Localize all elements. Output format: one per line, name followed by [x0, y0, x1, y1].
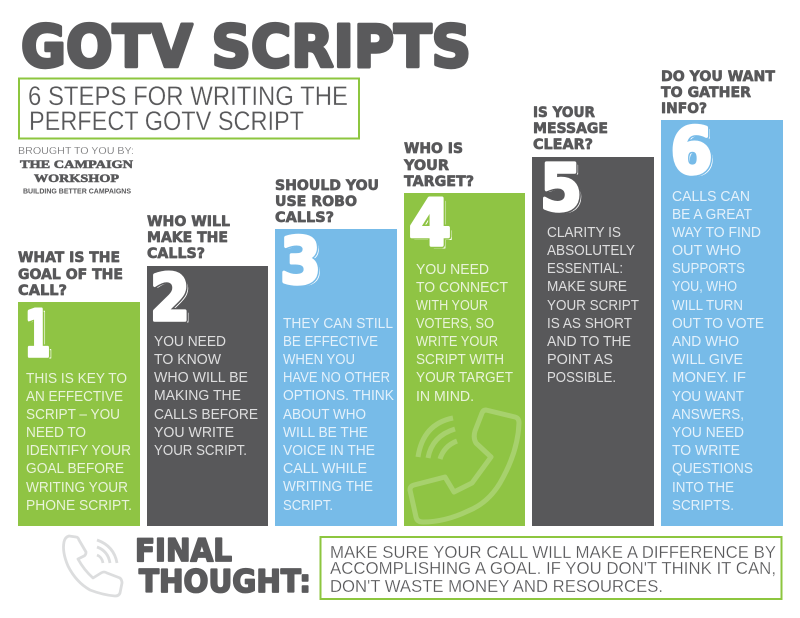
- step 6 text: [672, 189, 764, 514]
- step 6 text: SUPPORTS: [672, 261, 745, 277]
- step 1 text: SCRIPT – YOU: [26, 407, 120, 423]
- step 6 numeral: 6: [670, 115, 712, 189]
- step 4 numeral: 4: [409, 187, 451, 261]
- step 3 numeral: 3: [280, 225, 321, 299]
- step 4 text: YOUR TARGET: [416, 370, 513, 386]
- credit: The Campaign Workshop: BUILDING BETTER CAMPAIGNS: [23, 188, 131, 196]
- step 3 heading: SHOULD YOU: [275, 178, 379, 194]
- step 1 heading: GOAL OF THE: [18, 267, 123, 283]
- step 3 panel: [275, 229, 397, 526]
- step 3 text: HAVE NO OTHER: [283, 370, 390, 386]
- step 3 heading: [275, 178, 379, 226]
- step 2 numeral: 2: [150, 262, 190, 336]
- step 2 text: [154, 334, 258, 459]
- step 2 panel: [147, 266, 268, 526]
- step 6 text: YOU WANT: [672, 389, 744, 405]
- step 4 heading: TARGET?: [404, 174, 474, 190]
- subtitle box: 6 STEPS FOR WRITING THE: [28, 81, 348, 111]
- step 5: [532, 105, 654, 526]
- step 1 numeral: 1: [24, 298, 50, 372]
- step 6 text: WILL TURN: [672, 298, 743, 314]
- final thought heading: FINAL: [135, 533, 232, 569]
- step 2 text: TO KNOW: [154, 352, 221, 368]
- step 5 numeral: 5: [540, 152, 582, 226]
- step 4 heading: WHO IS: [404, 141, 463, 157]
- step 6 text: INTO THE: [672, 480, 734, 496]
- step 5 heading: MESSAGE: [533, 121, 608, 137]
- step 1 numeral: 1: [28, 300, 54, 374]
- step 4: [403, 141, 525, 526]
- step 3 heading: CALLS?: [275, 210, 334, 226]
- step 1: [18, 250, 140, 526]
- step 6 text: OUT WHO: [672, 243, 741, 259]
- title: GOTV SCRIPTS: [21, 12, 471, 80]
- step 5 panel: [532, 157, 654, 526]
- step 3 text: THEY CAN STILL: [283, 316, 393, 332]
- step 2 heading: MAKE THE: [147, 230, 228, 246]
- credit: The Campaign Workshop: [18, 145, 134, 196]
- step 6 heading: INFO?: [661, 101, 707, 117]
- step 6 text: SCRIPTS.: [672, 498, 734, 514]
- step 1 heading: WHAT IS THE: [18, 250, 120, 266]
- step 5 text: MAKE SURE: [547, 279, 627, 295]
- step 4 text: WITH YOUR: [416, 298, 488, 314]
- step 5 text: POSSIBLE.: [547, 370, 616, 386]
- step 2 text: WHO WILL BE: [154, 370, 248, 386]
- step 4 heading: YOUR: [403, 158, 449, 174]
- icon: telephone watermark: [410, 410, 519, 522]
- step 4 text: VOTERS, SO: [416, 316, 494, 332]
- step 5 heading: [533, 105, 608, 153]
- step 2 numeral: 2: [153, 264, 193, 338]
- step 3: [275, 178, 397, 526]
- step 5 text: ABSOLUTELY: [547, 243, 635, 259]
- step 1 numeral: 1: [24, 298, 50, 372]
- step 1 text: NEED TO: [26, 425, 86, 441]
- step 2 heading: [147, 214, 230, 262]
- final thought box: MAKE SURE YOUR CALL WILL MAKE A DIFFERENCE BY: [330, 542, 776, 562]
- step 1 text: THIS IS KEY TO: [26, 371, 127, 387]
- step 2 heading: CALLS?: [147, 246, 205, 262]
- step 6 numeral: 6: [674, 117, 716, 191]
- step 5 numeral: 5: [543, 154, 585, 228]
- step 4 text: YOU NEED: [416, 262, 489, 278]
- step 2 text: MAKING THE: [154, 388, 241, 404]
- step 4 heading: [403, 141, 474, 190]
- step 4 numeral: 4: [409, 187, 451, 261]
- step 1 panel: [18, 302, 140, 526]
- step 4 text: [416, 262, 513, 405]
- credit: The Campaign Workshop: THE CAMPAIGN: [20, 157, 133, 171]
- step 6: [661, 69, 783, 526]
- step 5 heading: CLEAR?: [533, 137, 593, 153]
- step 4 text: SCRIPT WITH: [416, 352, 504, 368]
- step 3 text: ABOUT WHO: [283, 407, 366, 423]
- step 6 text: MONEY. IF: [672, 370, 746, 386]
- step 5 text: POINT AS: [547, 352, 613, 368]
- step 6 text: BE A GREAT: [672, 207, 752, 223]
- credit: The Campaign Workshop: WORKSHOP: [34, 171, 119, 185]
- step 4 panel: [404, 193, 525, 526]
- step 3 text: CALL WHILE: [283, 461, 367, 477]
- final thought box: ACCOMPLISHING A GOAL. IF YOU DON'T THINK IT CAN,: [330, 558, 776, 578]
- step 3 text: WRITING THE: [283, 479, 373, 495]
- step 5 text: CLARITY IS: [547, 225, 621, 241]
- step 3 text: VOICE IN THE: [283, 443, 375, 459]
- step 4 text: WRITE YOUR: [416, 334, 498, 350]
- final thought box: [320, 537, 782, 599]
- step 2: [147, 214, 268, 526]
- step 3 text: WHEN YOU: [283, 352, 355, 368]
- step 5 text: AND TO THE: [547, 334, 631, 350]
- step 1 text: [26, 371, 132, 514]
- step 1 text: GOAL BEFORE: [26, 461, 124, 477]
- step 6 text: QUESTIONS: [672, 461, 753, 477]
- step 3 numeral: 3: [280, 225, 321, 299]
- step 6 panel: [661, 120, 783, 526]
- step 6 text: YOU NEED: [672, 425, 744, 441]
- step 5 text: IS AS SHORT: [547, 316, 632, 332]
- step 6 heading: [661, 69, 775, 117]
- step 2 numeral: 2: [150, 262, 190, 336]
- step 3 text: BE EFFECTIVE: [283, 334, 378, 350]
- icon: telephone: [64, 536, 122, 596]
- step 6 heading: DO YOU WANT: [661, 69, 775, 85]
- subtitle box: [19, 78, 359, 138]
- step 3 text: WILL BE THE: [283, 425, 368, 441]
- final thought heading: [135, 533, 311, 600]
- step 4 text: IN MIND.: [416, 389, 474, 405]
- step 3 heading: USE ROBO: [275, 194, 357, 210]
- step 2 text: CALLS BEFORE: [154, 407, 258, 423]
- step 6 text: AND WHO: [672, 334, 739, 350]
- step 6 numeral: 6: [670, 115, 712, 189]
- subtitle box: PERFECT GOTV SCRIPT: [29, 106, 304, 136]
- step 3 text: OPTIONS. THINK: [283, 388, 394, 404]
- step 5 numeral: 5: [540, 152, 582, 226]
- step 2 heading: WHO WILL: [147, 214, 230, 230]
- step 1 text: AN EFFECTIVE: [26, 389, 123, 405]
- step 1 text: IDENTIFY YOUR: [26, 443, 131, 459]
- step 5 text: ESSENTIAL:: [547, 261, 623, 277]
- step 1 heading: [18, 250, 123, 299]
- step 6 text: WAY TO FIND: [672, 225, 761, 241]
- step 6 text: TO WRITE: [672, 443, 740, 459]
- step 4 numeral: 4: [412, 190, 454, 264]
- step 5 text: [547, 225, 639, 386]
- step 3 text: SCRIPT.: [283, 498, 333, 514]
- credit: The Campaign Workshop: BROUGHT TO YOU BY:: [18, 145, 134, 157]
- step 2 text: YOU WRITE: [154, 425, 234, 441]
- step 6 text: OUT TO VOTE: [672, 316, 764, 332]
- step 2 text: YOU NEED: [154, 334, 226, 350]
- step 6 text: CALLS CAN: [672, 189, 750, 205]
- final thought heading: THOUGHT:: [139, 564, 311, 600]
- step 3 numeral: 3: [283, 227, 324, 301]
- step 6 text: YOU, WHO: [672, 279, 737, 295]
- step 5 text: YOUR SCRIPT: [547, 298, 639, 314]
- step 6 text: WILL GIVE: [672, 352, 743, 368]
- step 1 numeral: [24, 298, 54, 374]
- step 2 text: YOUR SCRIPT.: [154, 443, 247, 459]
- step 5 heading: IS YOUR: [533, 105, 595, 121]
- final thought box: DON'T WASTE MONEY AND RESOURCES.: [330, 576, 663, 596]
- step 3 text: [283, 316, 394, 514]
- step 6 heading: TO GATHER: [661, 85, 751, 101]
- step 6 text: ANSWERS,: [672, 407, 744, 423]
- step 1 heading: CALL?: [18, 283, 67, 299]
- step 1 text: PHONE SCRIPT.: [26, 498, 132, 514]
- step 1 text: WRITING YOUR: [26, 480, 128, 496]
- step 4 text: TO CONNECT: [416, 280, 508, 296]
